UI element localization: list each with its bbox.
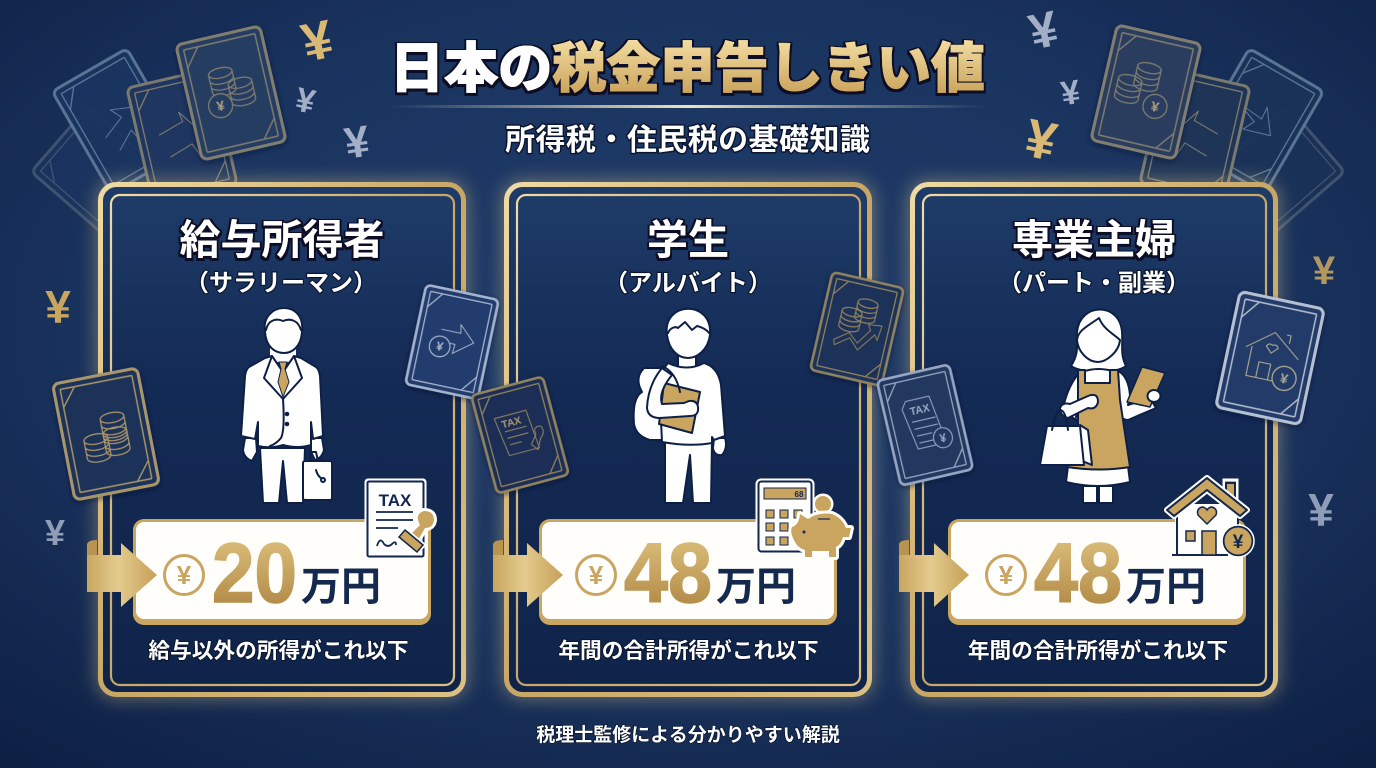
card frame: [506, 184, 870, 694]
yen symbols: scattered: ¥: [45, 281, 71, 333]
arrow: [899, 540, 969, 607]
yen symbols: scattered: ¥: [341, 117, 373, 169]
amount: 48: [1034, 526, 1122, 620]
card frame: [912, 184, 1276, 694]
caption: 年間の合計所得がこれ以下: [968, 638, 1228, 663]
yen symbols: scattered: ¥: [1058, 73, 1083, 113]
unit: 万円: [1126, 565, 1206, 609]
floating card: coins and chart: [810, 272, 904, 386]
floating card: house: ¥: [1279, 370, 1290, 387]
icon: student: [634, 309, 726, 503]
floating card: arrow and yen: [405, 285, 499, 399]
yen symbols: scattered: ¥: [1020, 108, 1062, 173]
heading: 専業主婦: [1012, 217, 1176, 263]
yen symbols: scattered: ¥: [1024, 0, 1063, 61]
icon: house with yen coin: [1167, 478, 1254, 557]
panel: 学生: [493, 180, 874, 699]
icon: businessman: [241, 308, 332, 503]
yen symbols: scattered: ¥: [292, 81, 319, 122]
value box: [948, 519, 1246, 625]
background card: faint right: [1199, 107, 1345, 249]
yen symbols: scattered: ¥: [1313, 249, 1336, 293]
value box: [539, 519, 837, 625]
value box: [133, 519, 431, 625]
icon: homemaker: [1040, 310, 1165, 503]
card frame: [100, 184, 464, 694]
background card: gold arrows right: [1140, 68, 1250, 202]
yen symbols: scattered: ¥: [1308, 484, 1334, 536]
title: 日本の税金申告しきい値: [390, 39, 985, 99]
arrow: [493, 540, 563, 607]
floating card: tax stamp: TAX: [500, 415, 523, 431]
floating card: tax document: ¥: [939, 432, 948, 446]
yen symbols: scattered: ¥: [45, 512, 65, 553]
background card: blue arrows right: [1190, 48, 1324, 194]
card glow: [502, 180, 874, 699]
amount: 20: [212, 526, 297, 620]
arrow: [87, 540, 157, 607]
card glow: [908, 180, 1280, 699]
icon: calculator and piggy bank: 68: [795, 490, 804, 499]
yen symbols: scattered: [45, 0, 1336, 553]
card glow: [96, 180, 468, 699]
icon: yen coin: ¥: [589, 560, 604, 590]
unit: 万円: [716, 565, 796, 609]
icon: house with yen coin: ¥: [1233, 532, 1244, 553]
icon: TAX document and stamp: [366, 480, 434, 558]
footer note: 税理士監修による分かりやすい解説: [536, 724, 840, 746]
title underline: [390, 105, 986, 108]
amount: 48: [624, 526, 712, 620]
icon: yen coin: [986, 556, 1026, 594]
icon: yen coin: [576, 556, 616, 594]
panel: 専業主婦: [899, 180, 1280, 699]
background card: coins left: [176, 26, 286, 160]
subheading: （パート・副業）: [998, 270, 1190, 297]
floating card: tax document: TAX: [909, 402, 931, 418]
background card: blue arrows left: [52, 48, 186, 194]
floating card: coins: [53, 368, 159, 500]
panel: 給与所得者: [87, 180, 468, 699]
floating card: tax stamp: [471, 376, 569, 494]
inner frame: [923, 195, 1266, 685]
background card: coins right: [1091, 25, 1201, 159]
inner frame: [111, 195, 454, 685]
icon: TAX document and stamp: TAX: [379, 491, 412, 510]
icon: yen coin: [164, 556, 204, 594]
subheading: （アルバイト）: [604, 270, 772, 297]
background card: gold arrows left: [127, 69, 237, 203]
caption: 年間の合計所得がこれ以下: [558, 638, 819, 663]
floating card: house: [1216, 291, 1324, 425]
icon: calculator and piggy bank: [757, 480, 851, 557]
inner frame: [517, 195, 860, 685]
background card: faint left: [31, 107, 177, 249]
subheading: （サラリーマン）: [185, 270, 377, 297]
floating card: arrow and yen: ¥: [435, 339, 445, 354]
icon: yen coin: ¥: [999, 560, 1014, 590]
yen symbols: scattered: ¥: [296, 9, 338, 74]
background card: coins left: ¥: [215, 97, 226, 114]
unit: 万円: [301, 565, 381, 609]
heading: 学生: [647, 217, 729, 263]
subtitle: 所得税・住民税の基礎知識: [505, 124, 870, 157]
caption: 給与以外の所得がこれ以下: [148, 638, 409, 663]
heading: 給与所得者: [180, 217, 384, 263]
background card: coins right: ¥: [1149, 98, 1161, 115]
floating card: tax document: [877, 364, 973, 486]
icon: yen coin: ¥: [177, 560, 192, 590]
